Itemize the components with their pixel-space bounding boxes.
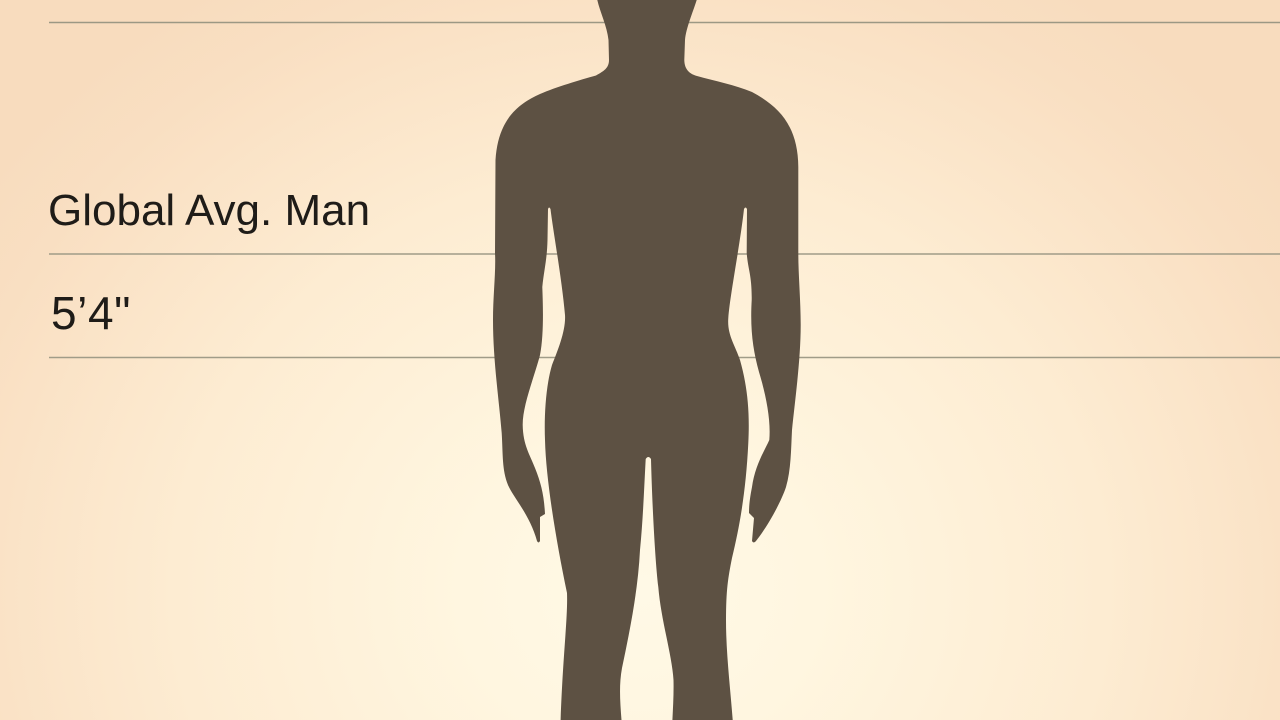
label: Global Avg. Man: Global Avg. Man [48, 186, 370, 235]
label: height value: 5’4" [51, 287, 131, 339]
icon: human silhouette [493, 0, 801, 720]
